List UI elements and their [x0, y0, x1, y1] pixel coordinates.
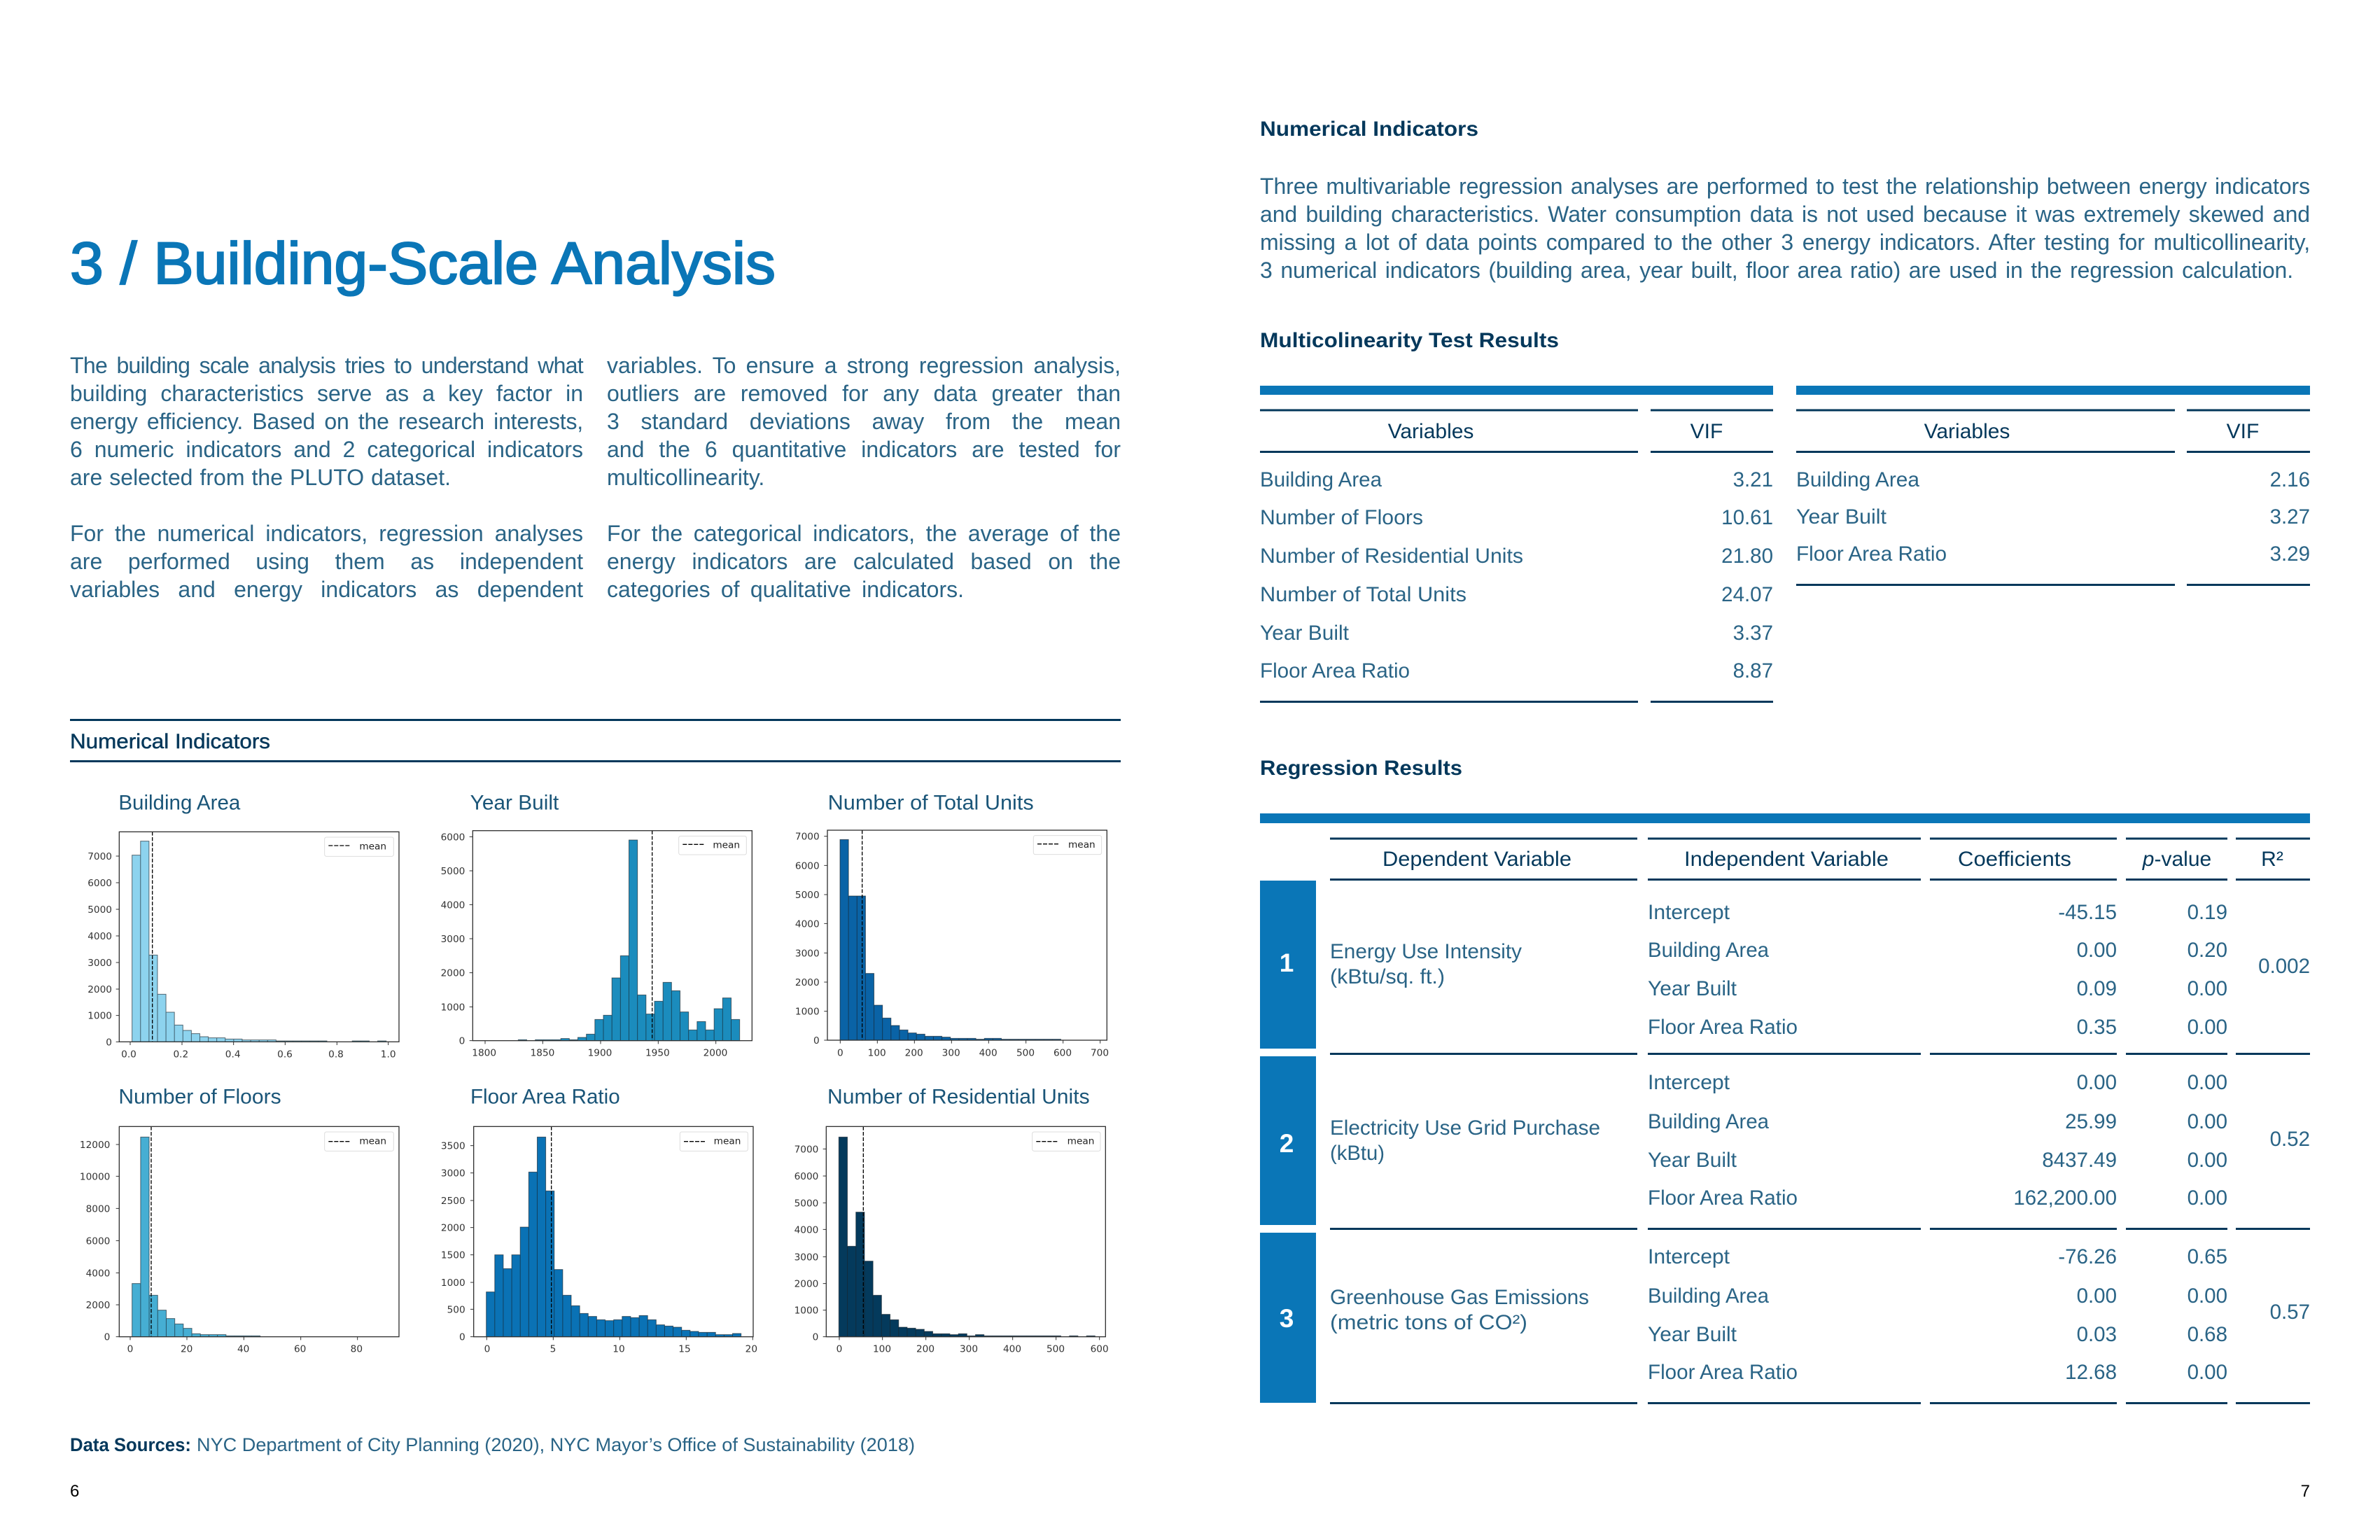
model 2: Electricity Use Grid Purchase	[1330, 1116, 1600, 1140]
chart: year built histogram: 1000	[441, 1002, 465, 1013]
model 3: Building Area	[1648, 1284, 1770, 1308]
text block: intro column 2: variables. To ensure a strong regression analysis,	[607, 353, 1121, 378]
chart: number of total units histogram: 400	[979, 1047, 997, 1058]
model 3: (metric tons of CO²)	[1330, 1311, 1527, 1334]
text block: numerical indicators description: Three multivariable regression analyses are performed to test the relationship between energy indicators	[1260, 174, 2310, 199]
chart: number of total units histogram	[795, 792, 1109, 1058]
text block: intro column 1: 6 numeric indicators and 2 categorical indicators	[70, 437, 583, 462]
chart: number of floors histogram: 4000	[86, 1268, 110, 1279]
section header: numerical indicators	[70, 719, 1121, 762]
chart: number of total units histogram: mean	[1068, 839, 1096, 850]
chart: number of residential units histogram: Number of Residential Units	[827, 1086, 1090, 1109]
model 2: 0.00	[2188, 1186, 2227, 1210]
chart: building area histogram: 1000	[88, 1011, 112, 1022]
model 3: -76.26	[2058, 1245, 2117, 1268]
chart: number of residential units histogram: 7000	[794, 1144, 818, 1155]
model 2: 0.00	[2188, 1071, 2227, 1094]
model 2: 25.99	[2065, 1110, 2117, 1133]
model 2	[1260, 1056, 2310, 1225]
model 1: Energy Use Intensity	[1330, 940, 1522, 963]
row: 3.29	[2270, 542, 2310, 566]
model 1	[1260, 881, 2310, 1049]
row	[1796, 505, 2310, 528]
heading: regression results: Regression Results	[1260, 757, 1462, 780]
row: 3.37	[1733, 622, 1773, 645]
chart: number of floors histogram: 80	[351, 1343, 363, 1354]
chart: number of residential units histogram: 0	[836, 1343, 842, 1354]
chart: number of total units histogram: 600	[1054, 1047, 1072, 1058]
chart: number of residential units histogram: 1000	[794, 1306, 818, 1317]
model 1: -45.15	[2058, 901, 2117, 924]
chart: number of total units histogram: 7000	[795, 832, 820, 843]
text block: intro column 2: multicollinearity.	[607, 465, 764, 490]
text block: intro column 1: For the numerical indicators, regression analyses	[70, 521, 583, 546]
chart: number of residential units histogram: 400	[1003, 1343, 1021, 1354]
table: VIF selected variables: VIF	[2227, 420, 2259, 443]
row: Year Built	[1260, 622, 1349, 645]
chart: building area histogram: 6000	[88, 878, 112, 889]
chart: building area histogram: 0	[106, 1037, 112, 1048]
chart: number of total units histogram: 4000	[795, 918, 820, 930]
chart: number of total units histogram: 0	[837, 1047, 844, 1058]
data sources: NYC Department of City Planning (2020), NYC Mayor’s Office of Sustainability (2018)	[197, 1434, 915, 1455]
chart: number of total units histogram: 1000	[795, 1007, 820, 1018]
chart: number of total units histogram: 6000	[795, 860, 820, 872]
model 3: 0.68	[2188, 1323, 2227, 1346]
chart: floor area ratio histogram: 2500	[441, 1196, 465, 1207]
chart: number of floors histogram: 8000	[86, 1203, 110, 1214]
text block: intro column 2: For the categorical indicators, the average of the	[607, 521, 1121, 546]
model 3: Greenhouse Gas Emissions	[1330, 1286, 1589, 1309]
row: 3.21	[1733, 468, 1773, 491]
chart: building area histogram: 5000	[88, 904, 112, 916]
text block: numerical indicators description: missing a lot of data points compared to the other 3 energy indicators. After testing for multicollinearity,	[1260, 230, 2310, 255]
chart: floor area ratio histogram: mean	[714, 1136, 741, 1147]
chart: number of floors histogram: 20	[181, 1343, 192, 1354]
chart: year built histogram: Year Built	[470, 792, 559, 815]
table header: p-value	[2142, 848, 2211, 871]
chart: floor area ratio histogram: 5	[550, 1343, 556, 1354]
row: Year Built	[1796, 505, 1886, 528]
row: 10.61	[1721, 506, 1773, 529]
chart: year built histogram: 3000	[441, 934, 465, 945]
row: Building Area	[1796, 468, 1920, 491]
table: VIF selected variables	[1796, 386, 2310, 586]
text block: intro column 2: and the 6 quantitative indicators are tested for	[607, 437, 1121, 462]
model 1: Floor Area Ratio	[1648, 1016, 1798, 1039]
chart: year built histogram: 4000	[441, 899, 465, 911]
chart: number of floors histogram: Number of Floors	[118, 1086, 281, 1109]
model 3: 0.03	[2077, 1323, 2117, 1346]
chart: floor area ratio histogram: 15	[678, 1343, 691, 1354]
model 1: 0.35	[2077, 1016, 2117, 1039]
chart: number of floors histogram	[80, 1086, 399, 1354]
chart: floor area ratio histogram: 10	[612, 1343, 625, 1354]
chart: building area histogram: 3000	[88, 958, 112, 969]
model 1: 1	[1280, 948, 1294, 977]
model 3: Year Built	[1648, 1323, 1737, 1346]
text block: intro column 1	[70, 353, 584, 602]
chart: year built histogram: 2000	[441, 968, 465, 979]
model 1: Intercept	[1648, 901, 1730, 924]
row	[1260, 622, 1773, 645]
model 1: Year Built	[1648, 977, 1737, 1000]
chart: floor area ratio histogram	[441, 1086, 757, 1354]
chart: year built histogram: 6000	[441, 832, 465, 843]
chart: building area histogram: 2000	[88, 984, 112, 995]
table: VIF all variables: Variables	[1388, 420, 1474, 443]
model 2: Intercept	[1648, 1071, 1730, 1094]
model 2: 0.00	[2188, 1110, 2227, 1133]
chart: number of total units histogram: 3000	[795, 948, 820, 959]
chart: number of total units histogram: 2000	[795, 977, 820, 988]
chart: number of residential units histogram: 0	[813, 1332, 818, 1343]
chart: number of residential units histogram: 5000	[794, 1198, 818, 1209]
chart: number of floors histogram: 6000	[86, 1236, 110, 1247]
text block: intro column 1: are performed using them as independent	[70, 549, 583, 574]
table: VIF selected variables: Variables	[1924, 420, 2010, 443]
model 1: 0.19	[2188, 901, 2227, 924]
chart: number of total units histogram: 500	[1016, 1047, 1035, 1058]
text block: intro column 2: energy indicators are calculated based on the	[607, 549, 1121, 574]
chart: year built histogram: 1900	[588, 1047, 612, 1058]
table: VIF all variables: VIF	[1690, 420, 1723, 443]
chart: number of residential units histogram	[794, 1086, 1109, 1354]
row	[1260, 659, 1773, 682]
text block: intro column 1: are selected from the PLUTO dataset.	[70, 465, 451, 490]
model 1: 0.20	[2188, 939, 2227, 962]
row	[1260, 583, 1773, 606]
chart: floor area ratio histogram: 3000	[441, 1168, 465, 1180]
chart: floor area ratio histogram: Floor Area Ratio	[470, 1086, 620, 1109]
chart: number of floors histogram: 2000	[86, 1300, 110, 1311]
model 2: 2	[1280, 1129, 1294, 1158]
chart: number of floors histogram: 12000	[80, 1140, 110, 1151]
chart: floor area ratio histogram: 0	[484, 1343, 490, 1354]
data sources: Data Sources:	[70, 1434, 191, 1455]
model 2: (kBtu)	[1330, 1142, 1385, 1165]
model 2: 162,200.00	[2013, 1186, 2117, 1210]
text block: numerical indicators description: and building characteristics. Water consumption data is not used because it was extremely skewed and	[1260, 202, 2310, 227]
model 2: 0.00	[2188, 1149, 2227, 1172]
chart: year built histogram	[441, 792, 752, 1058]
chart: number of floors histogram: mean	[359, 1136, 386, 1147]
chart: floor area ratio histogram: 0	[459, 1332, 465, 1343]
chart: building area histogram: Building Area	[118, 792, 241, 815]
model 3: 3	[1280, 1304, 1294, 1333]
chart: year built histogram: 1800	[472, 1047, 496, 1058]
row	[1796, 468, 2310, 491]
row: Number of Residential Units	[1260, 545, 1523, 568]
row: 21.80	[1721, 545, 1773, 568]
table header: Independent Variable	[1684, 848, 1889, 871]
model 2: 0.00	[2077, 1071, 2117, 1094]
chart: building area histogram: 0.2	[173, 1049, 188, 1060]
chart: number of floors histogram: 0	[127, 1343, 133, 1354]
model 2: Floor Area Ratio	[1648, 1186, 1798, 1210]
chart: number of total units histogram: Number of Total Units	[828, 792, 1034, 815]
chart: floor area ratio histogram: 500	[447, 1304, 465, 1315]
chart: building area histogram: 0.6	[277, 1049, 293, 1060]
chart: number of residential units histogram: 4000	[794, 1224, 818, 1236]
row: Number of Total Units	[1260, 583, 1466, 606]
chart: number of residential units histogram: 200	[916, 1343, 934, 1354]
chart: building area histogram	[88, 792, 399, 1060]
chart: floor area ratio histogram: 3500	[441, 1141, 465, 1152]
chart: number of total units histogram: 700	[1091, 1047, 1109, 1058]
chart: year built histogram: 1950	[645, 1047, 670, 1058]
row: 8.87	[1733, 659, 1773, 682]
text block: intro column 1: The building scale analysis tries to understand what	[70, 353, 583, 378]
model 2: 0.52	[2270, 1128, 2310, 1151]
chart: building area histogram: mean	[359, 841, 386, 852]
chart: year built histogram: 1850	[531, 1047, 554, 1058]
chart: number of residential units histogram: 100	[873, 1343, 891, 1354]
model 1: 0.002	[2258, 955, 2310, 978]
chart: floor area ratio histogram: 2000	[441, 1223, 465, 1234]
page number left: 6	[70, 1482, 79, 1501]
row: Floor Area Ratio	[1796, 542, 1947, 566]
chart: building area histogram: 1.0	[381, 1049, 396, 1060]
model 1: 0.00	[2188, 1016, 2227, 1039]
text block: intro column 1: energy efficiency. Based on the research interests,	[70, 409, 583, 434]
chart: number of floors histogram: 40	[237, 1343, 249, 1354]
chart: number of total units histogram: 300	[942, 1047, 960, 1058]
chart: floor area ratio histogram: 20	[746, 1343, 757, 1354]
chart: year built histogram: 2000	[704, 1047, 727, 1058]
text block: numerical indicators description	[1260, 174, 2310, 283]
chart: number of residential units histogram: 300	[960, 1343, 978, 1354]
chart: number of residential units histogram: 2000	[794, 1279, 818, 1290]
model 3: 0.00	[2077, 1284, 2117, 1308]
table: regression results	[1260, 813, 2310, 1404]
chart: floor area ratio histogram: 1000	[441, 1278, 465, 1289]
chart: building area histogram: 4000	[88, 931, 112, 942]
chart: building area histogram: 7000	[88, 851, 112, 862]
chart: building area histogram: 0.4	[225, 1049, 241, 1060]
chart: number of total units histogram: 100	[868, 1047, 886, 1058]
table header	[1382, 848, 2283, 871]
row	[1796, 542, 2310, 566]
row	[1260, 506, 1773, 529]
model 3: 0.57	[2270, 1301, 2310, 1324]
text block: intro column 2: categories of qualitative indicators.	[607, 577, 964, 602]
text block: intro column 1: variables and energy indicators as dependent	[70, 577, 583, 602]
chart: number of total units histogram: 200	[905, 1047, 923, 1058]
chart: year built histogram: mean	[713, 840, 740, 851]
table header: Coefficients	[1958, 848, 2071, 871]
chart: number of total units histogram: 5000	[795, 890, 820, 901]
model 1: (kBtu/sq. ft.)	[1330, 965, 1445, 988]
row: Building Area	[1260, 468, 1382, 491]
chart: number of residential units histogram: 600	[1091, 1343, 1109, 1354]
title: 3 / Building-Scale Analysis	[70, 230, 776, 296]
chart: number of residential units histogram: 3000	[794, 1252, 818, 1263]
table: VIF all variables	[1260, 386, 1773, 703]
model 3: 0.65	[2188, 1245, 2227, 1268]
chart: number of total units histogram: 0	[813, 1035, 820, 1046]
chart: number of residential units histogram: 500	[1046, 1343, 1065, 1354]
heading: numerical indicators: Numerical Indicators	[1260, 118, 1478, 141]
row: 24.07	[1721, 583, 1773, 606]
chart: building area histogram: 0.0	[121, 1049, 136, 1060]
text block: intro column 2: outliers are removed for any data greater than	[607, 381, 1121, 406]
chart: number of floors histogram: 0	[104, 1332, 110, 1343]
chart: building area histogram: 0.8	[328, 1049, 344, 1060]
row: Number of Floors	[1260, 506, 1423, 529]
row: 2.16	[2270, 468, 2310, 491]
row: Floor Area Ratio	[1260, 659, 1410, 682]
page number right: 7	[2301, 1482, 2310, 1501]
model 1: 0.09	[2077, 977, 2117, 1000]
model 1: Building Area	[1648, 939, 1770, 962]
row	[1260, 468, 1773, 491]
text block: intro column 2	[607, 353, 1121, 602]
chart: number of residential units histogram: mean	[1068, 1136, 1094, 1147]
chart: year built histogram: 0	[459, 1036, 465, 1047]
model 3: Floor Area Ratio	[1648, 1361, 1798, 1384]
model 3: Intercept	[1648, 1245, 1730, 1268]
model 2: Building Area	[1648, 1110, 1770, 1133]
text block: numerical indicators description: 3 numerical indicators (building area, year built, floor area ratio) are used in the regression calculation.	[1260, 258, 2293, 283]
chart: year built histogram: 5000	[441, 866, 465, 877]
table header: R²	[2261, 848, 2283, 871]
section header: numerical indicators: Numerical Indicators	[70, 730, 270, 753]
row: 3.27	[2270, 505, 2310, 528]
model 1: 0.00	[2188, 977, 2227, 1000]
text block: intro column 1: building characteristics serve as a key factor in	[70, 381, 583, 406]
model 3: 0.00	[2188, 1284, 2227, 1308]
model 1: 0.00	[2077, 939, 2117, 962]
model 3: 0.00	[2188, 1361, 2227, 1384]
row	[1260, 545, 1773, 568]
model 3: 12.68	[2065, 1361, 2117, 1384]
table header: Dependent Variable	[1382, 848, 1572, 871]
chart: number of residential units histogram: 6000	[794, 1171, 818, 1182]
chart: floor area ratio histogram: 1500	[441, 1250, 465, 1261]
text block: intro column 2: 3 standard deviations away from the mean	[607, 409, 1121, 434]
model 3	[1260, 1233, 2310, 1403]
model 2: Year Built	[1648, 1149, 1737, 1172]
heading: multicollinearity: Multicolinearity Test Results	[1260, 329, 1559, 352]
chart: number of floors histogram: 60	[294, 1343, 306, 1354]
model 2: 8437.49	[2042, 1149, 2117, 1172]
chart: number of floors histogram: 10000	[80, 1171, 110, 1182]
